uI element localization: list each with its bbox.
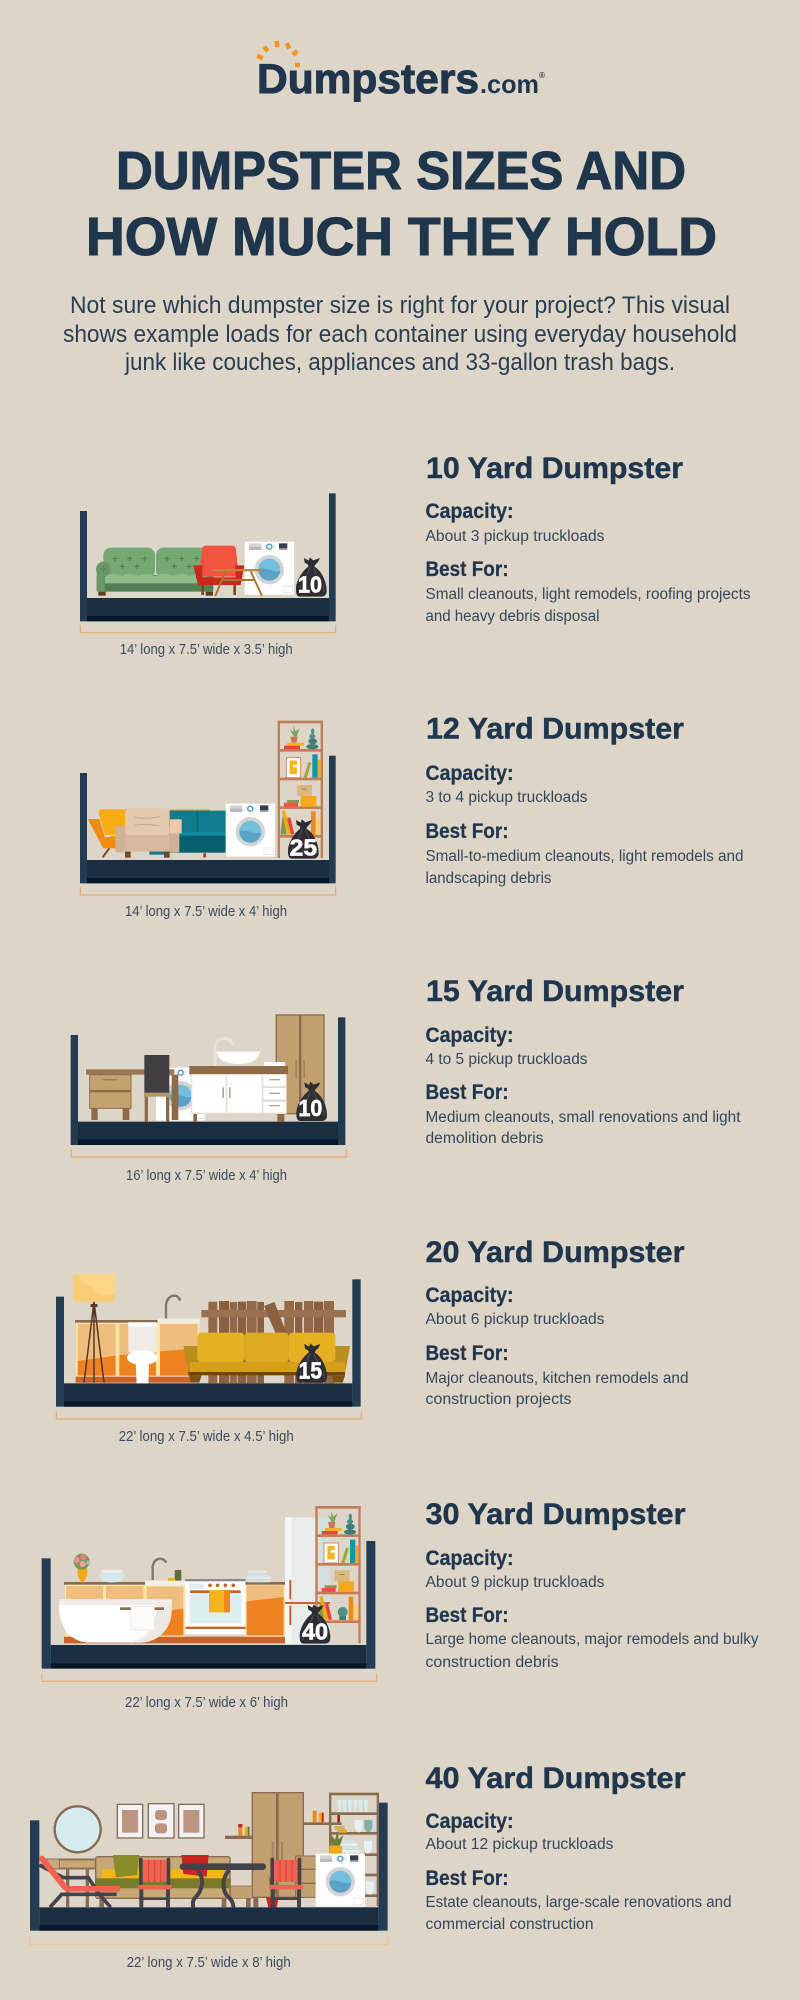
bathroom vanity <box>189 1038 288 1122</box>
desk <box>86 1069 178 1120</box>
details: 40 yard dumpster: Best For: <box>426 1867 508 1890</box>
details: 20 yard dumpster: 20 Yard Dumpster <box>426 1236 685 1269</box>
details: 40 yard dumpster: About 12 pickup truckloads <box>426 1836 614 1853</box>
wooden side table <box>213 569 262 596</box>
details: 12 yard dumpster: landscaping debris <box>426 870 552 887</box>
dimension bracket <box>71 1149 347 1157</box>
plant in yellow pot <box>329 1830 343 1854</box>
dumpster container <box>71 1017 345 1145</box>
logo suffix: .com <box>480 69 539 99</box>
title <box>86 141 717 267</box>
details: 15 yard dumpster: Medium cleanouts, small renovations and light <box>426 1109 741 1126</box>
panel: 30 yard dumpster <box>42 1498 759 1711</box>
wall shelves with books <box>225 1811 342 1839</box>
red armchair <box>193 546 244 595</box>
details: 12 yard dumpster: Small-to-medium cleanouts, light remodels and <box>426 848 744 865</box>
trash bag count: 15: 15 <box>299 1357 322 1383</box>
panel: 40 yard dumpster <box>30 1762 732 1971</box>
logo: Dumpsters.com <box>257 41 545 102</box>
details: 15 yard dumpster: 15 Yard Dumpster <box>426 975 684 1008</box>
potted plant <box>266 1874 279 1907</box>
green sofa <box>96 548 213 596</box>
dimensions: 22’ long x 7.5’ wide x 6’ high <box>125 1695 288 1711</box>
details: 30 yard dumpster: construction debris <box>426 1654 559 1671</box>
trash bag count: 10 <box>296 1082 327 1121</box>
details: 20 yard dumpster <box>426 1236 688 1408</box>
trash bag count: 10: 10 <box>298 1095 322 1121</box>
panel: 20 yard dumpster <box>56 1236 689 1445</box>
dimensions: 14’ long x 7.5’ wide x 4’ high <box>125 904 287 920</box>
details: 10 yard dumpster: Small cleanouts, light remodels, roofing projects <box>426 586 751 603</box>
illustration: 30 yard dumpster load <box>42 1506 377 1681</box>
trash bag count: 10: 10 <box>298 572 322 598</box>
details: 40 yard dumpster: 40 Yard Dumpster <box>426 1762 686 1795</box>
trash bag count: 40: 40 <box>302 1618 328 1644</box>
illustration: 10 yard dumpster load <box>80 493 336 633</box>
details: 20 yard dumpster: About 6 pickup truckloads <box>426 1311 605 1328</box>
details: 10 yard dumpster: Best For: <box>426 558 508 581</box>
details: 20 yard dumpster: construction projects <box>426 1391 572 1408</box>
details: 30 yard dumpster: About 9 pickup truckloads <box>426 1574 605 1591</box>
details: 10 yard dumpster: and heavy debris disposal <box>426 608 600 625</box>
details: 10 yard dumpster <box>426 452 751 625</box>
trash bag count: 40 <box>300 1604 330 1644</box>
trash bag count: 25 <box>288 819 319 860</box>
details: 20 yard dumpster: Capacity: <box>426 1284 514 1307</box>
washing machine <box>316 1854 365 1907</box>
yellow sofa <box>183 1333 350 1383</box>
lounge chair <box>39 1859 120 1907</box>
details: 20 yard dumpster: Major cleanouts, kitchen remodels and <box>426 1370 688 1387</box>
refrigerator <box>285 1517 330 1644</box>
details: 30 yard dumpster <box>426 1498 759 1671</box>
globe on shelf <box>338 1607 348 1620</box>
details: 12 yard dumpster: 3 to 4 pickup truckloads <box>426 789 588 806</box>
registered mark: ® <box>539 71 545 80</box>
side cabinets <box>47 1856 317 1907</box>
details: 40 yard dumpster: commercial construction <box>426 1916 594 1933</box>
details: 15 yard dumpster <box>426 975 741 1147</box>
intro paragraph: Not sure which dumpster size is right for your project? This visual <box>70 292 730 319</box>
illustration: 40 yard dumpster load <box>30 1793 388 1944</box>
details: 30 yard dumpster: Best For: <box>426 1604 508 1627</box>
details: 20 yard dumpster: Best For: <box>426 1342 508 1365</box>
illustration: 12 yard dumpster load <box>80 721 336 895</box>
details: 30 yard dumpster: Capacity: <box>426 1547 514 1570</box>
details: 40 yard dumpster <box>426 1762 732 1933</box>
orange lounge chair <box>88 809 130 857</box>
dimensions: 14’ long x 7.5’ wide x 3.5’ high <box>120 642 293 658</box>
trash bag count: 15 <box>296 1343 327 1383</box>
details: 40 yard dumpster: Capacity: <box>426 1810 514 1833</box>
dimension bracket <box>80 887 336 895</box>
dimensions: 22’ long x 7.5’ wide x 8’ high <box>127 1955 291 1971</box>
teal sofa <box>149 809 227 857</box>
details: 10 yard dumpster: 10 Yard Dumpster <box>426 452 683 485</box>
dimensions: 16’ long x 7.5’ wide x 4’ high <box>126 1168 287 1184</box>
dining chair <box>144 1055 170 1122</box>
details: 30 yard dumpster: Large home cleanouts, major remodels and bulky <box>426 1631 759 1648</box>
oven <box>185 1579 246 1634</box>
details: 12 yard dumpster: 12 Yard Dumpster <box>426 712 684 746</box>
illustration: 15 yard dumpster load <box>71 1015 347 1157</box>
dining chair right <box>269 1858 303 1907</box>
round mirror <box>55 1806 101 1852</box>
details: 15 yard dumpster: 4 to 5 pickup truckloads <box>426 1051 588 1068</box>
washing machine <box>226 804 275 857</box>
panel: 15 yard dumpster <box>71 975 741 1184</box>
dimension bracket <box>56 1411 361 1419</box>
washing machine <box>156 1068 205 1121</box>
kitchen cabinets <box>75 1296 200 1383</box>
sofa with cushions <box>96 1855 231 1907</box>
floor lamp <box>73 1274 115 1383</box>
tall wardrobe <box>276 1015 324 1114</box>
wooden fence panels <box>201 1301 346 1383</box>
dimension bracket <box>80 625 336 633</box>
intro paragraph <box>63 292 737 376</box>
white bathtub <box>59 1599 172 1643</box>
details: 12 yard dumpster: Capacity: <box>426 762 514 785</box>
beige armchair <box>115 808 182 858</box>
intro paragraph: junk like couches, appliances and 33-gallon trash bags. <box>124 349 675 376</box>
details: 40 yard dumpster: Estate cleanouts, large-scale renovations and <box>426 1894 732 1911</box>
details: 10 yard dumpster: Capacity: <box>426 500 514 523</box>
dimension bracket <box>42 1673 377 1681</box>
dining chair left <box>138 1858 172 1907</box>
dumpster container <box>30 1803 388 1931</box>
trash bag count: 10 <box>296 557 327 598</box>
title: HOW MUCH THEY HOLD <box>86 207 717 267</box>
dumpster container <box>56 1279 361 1407</box>
details: 15 yard dumpster: demolition debris <box>426 1130 544 1147</box>
intro paragraph: shows example loads for each container using everyday household <box>63 321 737 348</box>
title: DUMPSTER SIZES AND <box>116 141 686 201</box>
details: 15 yard dumpster: Best For: <box>426 1081 508 1104</box>
details: 12 yard dumpster <box>426 712 744 887</box>
details: 15 yard dumpster: Capacity: <box>426 1024 514 1047</box>
details: 30 yard dumpster: 30 Yard Dumpster <box>426 1498 686 1531</box>
framed pictures <box>117 1804 204 1838</box>
dimensions: 22’ long x 7.5’ wide x 4.5’ high <box>119 1429 294 1445</box>
dumpster container <box>80 493 336 621</box>
panel: 10 yard dumpster <box>80 452 751 658</box>
round dining table <box>180 1863 266 1907</box>
bookshelf <box>278 721 323 858</box>
dumpster container <box>42 1541 375 1669</box>
washing machine <box>245 542 294 595</box>
details: 10 yard dumpster: About 3 pickup truckloads <box>426 528 605 545</box>
toilet <box>127 1322 158 1383</box>
icon: logo sunburst <box>257 41 300 65</box>
glass shelving unit <box>329 1793 379 1906</box>
dumpster container <box>80 756 336 883</box>
panel: 12 yard dumpster <box>80 712 744 920</box>
bookshelf <box>315 1506 361 1643</box>
trash bag count: 25: 25 <box>290 834 317 860</box>
logo wordmark: Dumpsters <box>257 55 479 102</box>
details: 12 yard dumpster: Best For: <box>426 820 508 843</box>
countertop items: faucet, vase, bowl, bottle, plates <box>74 1554 271 1582</box>
illustration: 20 yard dumpster load <box>56 1274 361 1419</box>
kitchen counter <box>64 1581 285 1643</box>
wardrobe <box>252 1793 303 1907</box>
dimension bracket <box>30 1937 388 1944</box>
